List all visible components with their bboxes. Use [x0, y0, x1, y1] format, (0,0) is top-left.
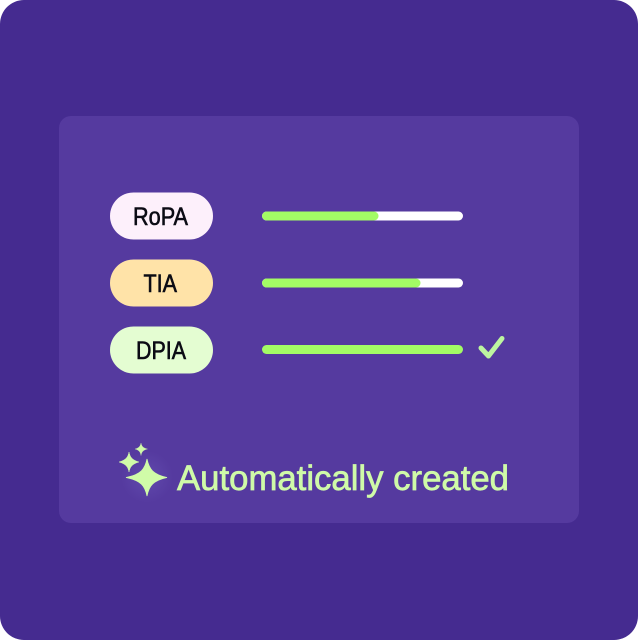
caption: Automatically created: [177, 459, 509, 498]
pill: TIA: TIA: [144, 270, 177, 298]
inner card: [59, 116, 579, 523]
pill: TIA: [110, 260, 213, 306]
pill: DPIA: DPIA: [136, 337, 186, 365]
pill: RoPA: RoPA: [133, 203, 188, 231]
row: RoPA: [110, 192, 463, 240]
icon: sparkles: [119, 443, 173, 503]
icon: check mark: [481, 338, 502, 356]
progress bar: TIA: [262, 278, 463, 288]
progress bar: DPIA: [262, 345, 463, 354]
pill: RoPA: [110, 192, 213, 240]
row: DPIA: [110, 326, 502, 374]
pill: DPIA: [110, 326, 213, 374]
row: TIA: [110, 260, 463, 306]
progress bar: RoPA: [262, 212, 463, 220]
